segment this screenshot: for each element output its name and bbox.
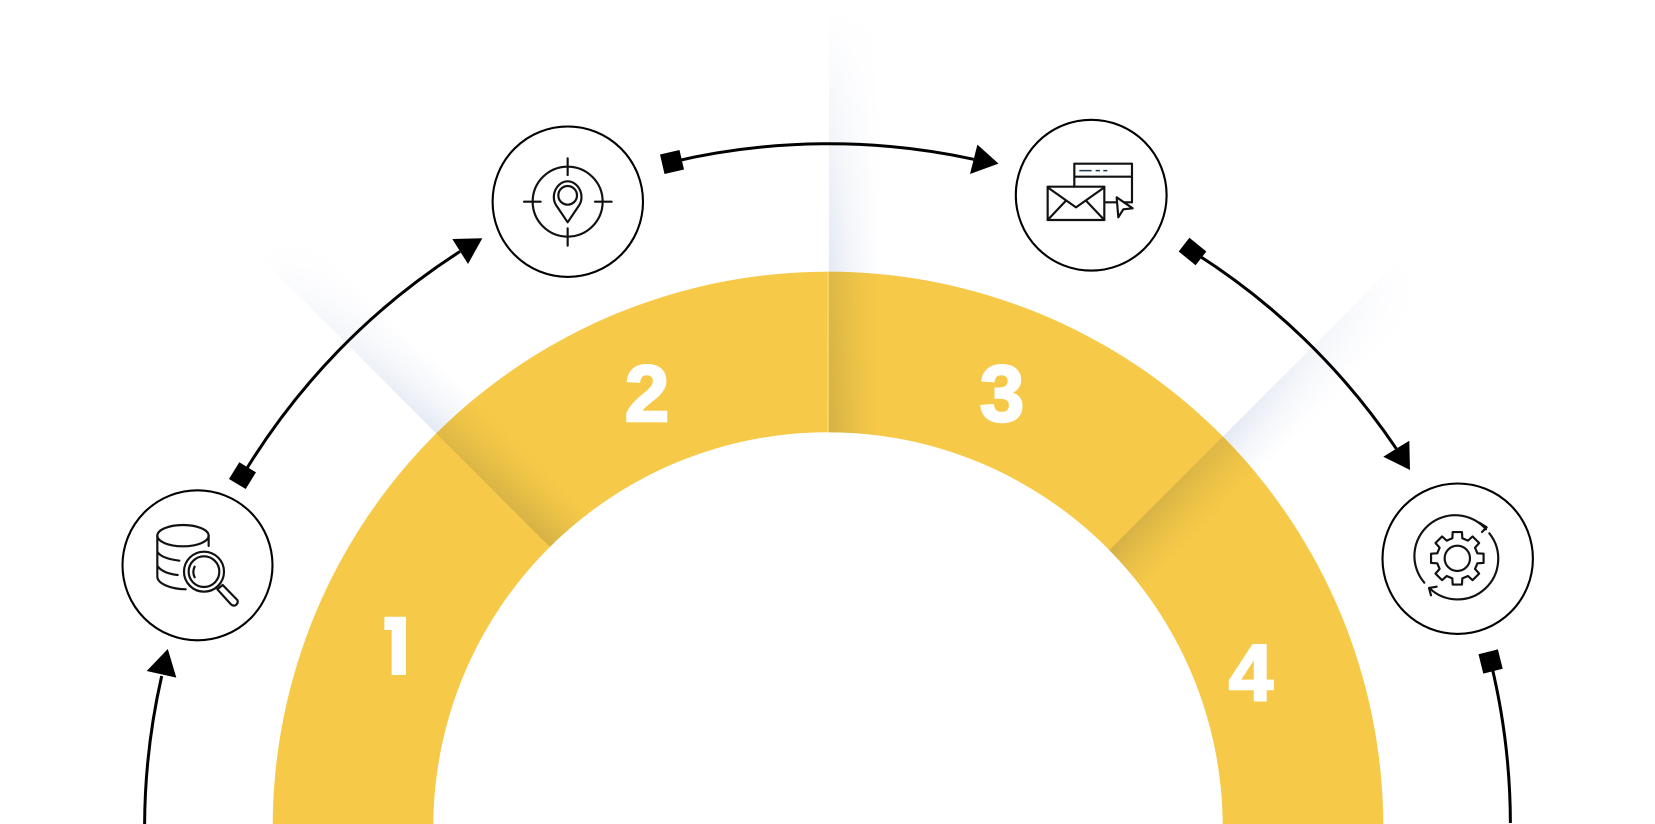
icon circle: database search [122,490,272,640]
step number 2: 2 [625,349,669,438]
step number 1 [384,616,406,675]
icon circle: email and web page [1016,120,1167,271]
arrow: step 1 to step 2 [229,238,482,489]
step number 4: 4 [1229,628,1274,717]
arrow: step 3 to step 4 [1179,238,1410,470]
step number 3: 3 [980,349,1024,438]
icon circle: location target [493,126,643,277]
arrow: step 2 to step 3 [660,144,998,174]
arrow: step 4 continuing down right [1478,649,1510,823]
band: soft shadow above seam between segments 3 and 4 [1218,259,1436,477]
arrow: bottom left up to step 1 [145,649,176,824]
diagram: circular four-step cycle [121,86,1534,824]
band: soft shadow above seam between segments 1 and 2 [259,221,477,438]
yellow arch ring [273,266,1383,824]
step number 1: 1 [370,602,416,693]
band: soft shadow above seam between segments 2 and 3 [828,12,880,278]
icon circle: gear with cycle arrows [1382,484,1533,634]
